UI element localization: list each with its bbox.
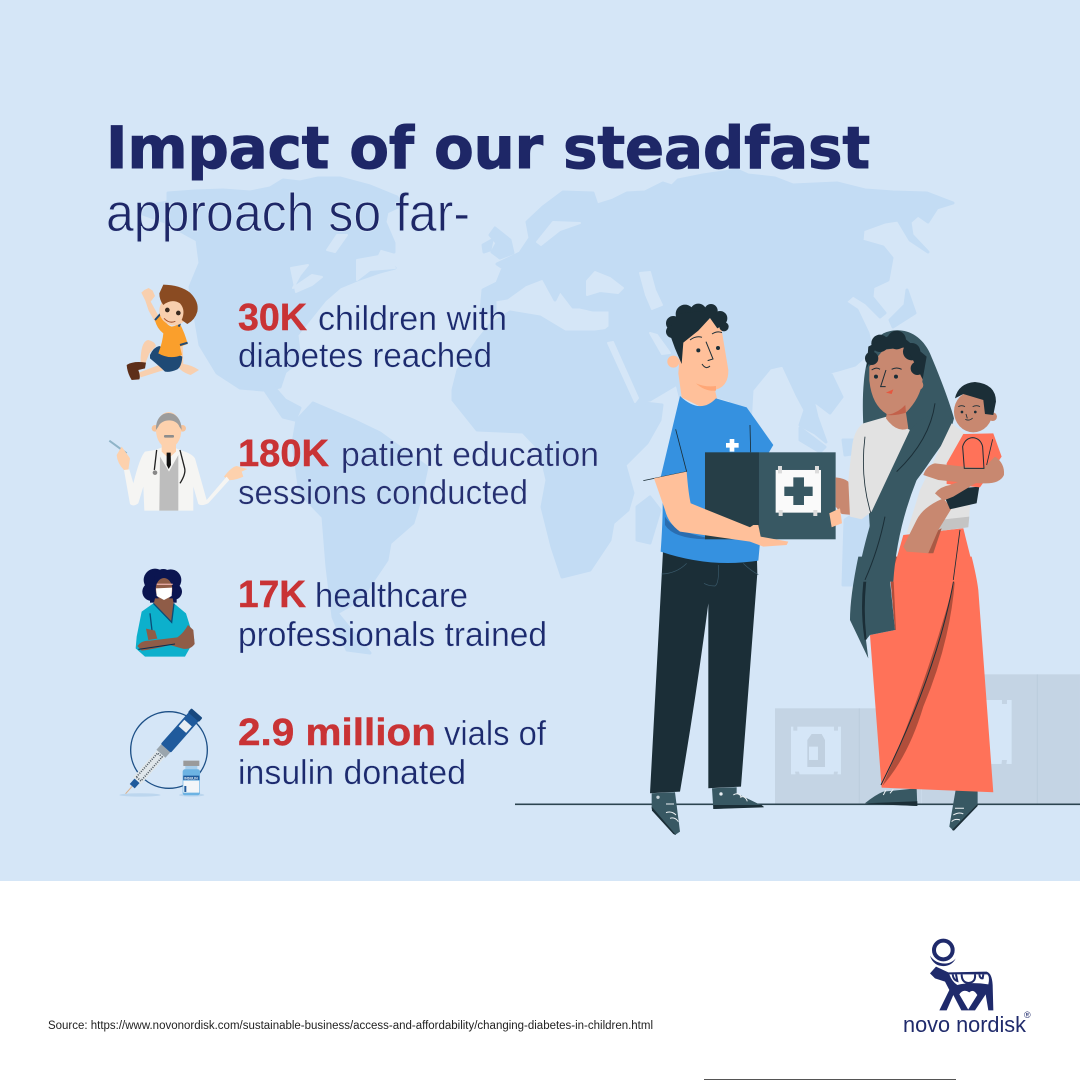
stat text: vials of (444, 715, 547, 753)
logo mark: bull with sun (930, 941, 993, 1010)
stat: professionals trained (136, 569, 547, 657)
subtitle: approach so far- (106, 183, 470, 243)
map inland seas (291, 222, 670, 402)
stat text (238, 433, 599, 512)
icon: masked nurse (136, 569, 195, 657)
illustration: volunteer handing medical kit (643, 304, 836, 835)
icon: insulin pen and vial (119, 708, 207, 799)
stat text (238, 712, 547, 792)
ground line (515, 804, 1080, 805)
volunteer upper body and kit (643, 304, 836, 563)
stat text: 180K (238, 433, 330, 475)
stat text: professionals trained (238, 616, 547, 654)
icon: insulin pen and vial: INSULIN (184, 776, 198, 780)
volunteer lower body (650, 545, 764, 835)
title: Impact of our steadfast (106, 114, 870, 182)
logo: novo nordisk (903, 941, 1031, 1037)
bottom rule (704, 1079, 956, 1080)
logo wordmark: novo nordisk (903, 1012, 1027, 1037)
stat text: insulin donated (238, 754, 466, 792)
mother upper body and baby (829, 330, 1004, 582)
stat text: diabetes reached (238, 337, 492, 375)
stat text: 30K (238, 297, 308, 339)
stat: education sessions (109, 412, 599, 512)
background supply boxes (775, 674, 1080, 804)
stat: children reached (127, 285, 507, 380)
illustration: mother holding baby (829, 330, 1004, 831)
stat text: children with (318, 300, 507, 338)
stat text: 17K (238, 574, 307, 616)
stat: insulin donated (119, 708, 547, 799)
footer panel (0, 881, 1080, 1080)
stat text: patient education (341, 436, 599, 474)
mother lower body (850, 557, 993, 831)
stat text: 2.9 million (238, 712, 436, 754)
stat text (238, 574, 547, 654)
stat text: sessions conducted (238, 474, 528, 512)
registered mark: ® (1024, 1010, 1031, 1020)
stat text (238, 297, 507, 375)
stat text: healthcare (315, 577, 468, 615)
icon: waving boy (127, 285, 199, 380)
source note: Source: https://www.novonordisk.com/sustainable-business/access-and-affordability/changing-diabetes-in-children.html (48, 1020, 653, 1032)
icon: doctor with syringe (109, 412, 247, 511)
world map (140, 170, 953, 653)
